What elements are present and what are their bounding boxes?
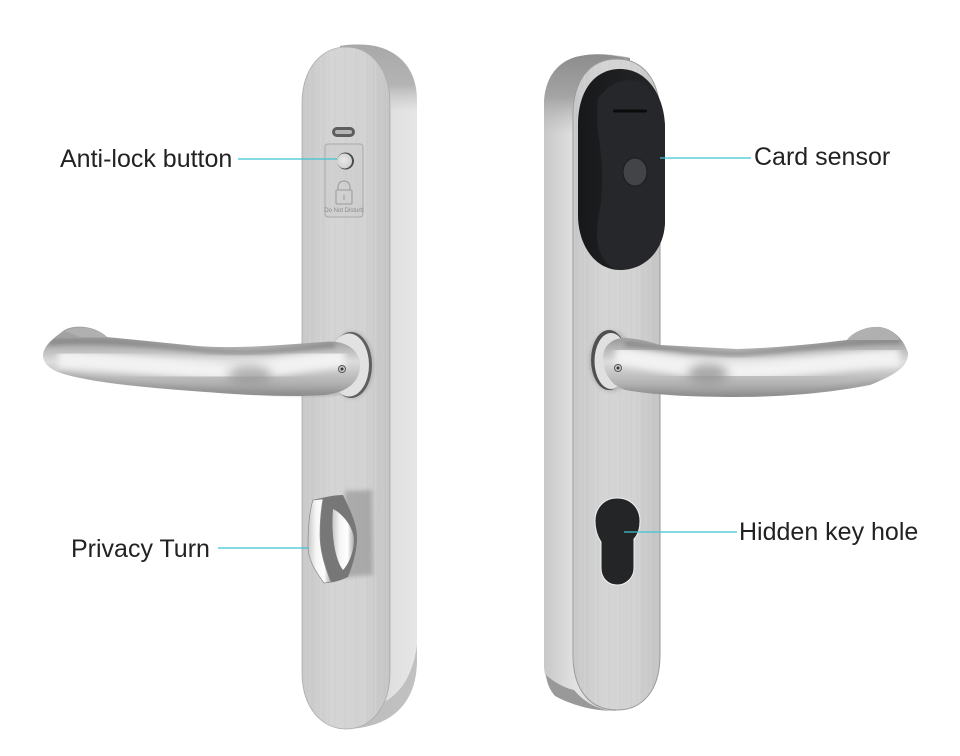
plate side edge: [340, 44, 417, 729]
plate front face: [302, 47, 390, 729]
card sensor housing: [578, 69, 665, 270]
padlock icon: [336, 181, 352, 204]
lever: [43, 327, 360, 396]
do not disturb panel: [324, 144, 364, 217]
plate side edge: [544, 54, 630, 711]
right lock plate: [544, 54, 665, 711]
callout: privacy turn: Privacy Turn: [71, 535, 210, 563]
left handle: [43, 327, 373, 398]
privacy turn shadow block: [345, 490, 373, 577]
card slot: [613, 110, 647, 112]
hidden key hole: [595, 498, 640, 585]
do not disturb label: Do Not Disturb: [324, 208, 364, 214]
privacy turn knob: [308, 495, 357, 583]
grub screw: [338, 366, 346, 372]
indicator light: [332, 127, 355, 137]
callout: anti-lock button: Anti-lock button: [60, 145, 232, 173]
anti-lock push button: [337, 152, 354, 170]
callout: card sensor: Card sensor: [754, 143, 890, 171]
grub screw: [614, 364, 622, 372]
rosette: [590, 330, 632, 391]
sensor window: [623, 158, 647, 186]
left lock plate: [302, 44, 417, 729]
plate front face: [573, 59, 660, 710]
rosette: [329, 332, 373, 398]
lever: [603, 327, 908, 397]
right handle: [590, 327, 908, 397]
callout: hidden key hole: Hidden key hole: [739, 518, 918, 546]
